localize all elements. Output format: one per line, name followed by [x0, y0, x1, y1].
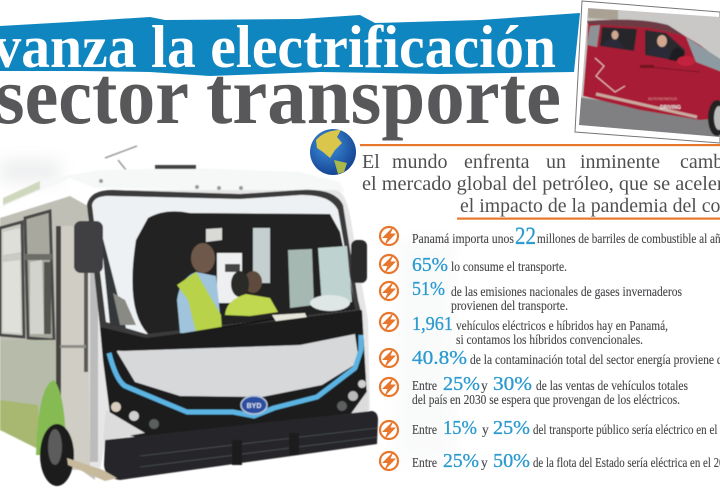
right mirror [351, 240, 367, 283]
fact 8: state fleet: 50% [493, 450, 530, 472]
wheel arch [36, 380, 66, 455]
fact 7: public transport: 25% [493, 417, 530, 439]
intro text: enfrenta [464, 151, 530, 173]
door [58, 226, 90, 470]
fact 6: sales 2030: 25% [443, 373, 480, 395]
title line 2: transporte [206, 50, 561, 141]
photo frame [575, 1, 720, 143]
front body [88, 190, 370, 470]
fact 7: public transport: 15% [443, 417, 477, 439]
fact 2: consumption [380, 254, 567, 276]
driver in vest [225, 271, 278, 316]
orange rule top [360, 144, 720, 146]
fact 8: state fleet: 25% [443, 450, 479, 472]
blue led strip [109, 335, 361, 416]
fact 8: state fleet: Entre [412, 455, 437, 470]
fact 8: state fleet [380, 450, 720, 472]
car scene: DRIVING [660, 105, 681, 111]
fact 2: consumption: 65% [412, 254, 448, 276]
silver corners [103, 410, 145, 440]
fact 6: sales 2030: de las ventas de vehículos totales [536, 378, 688, 393]
fact 3: emissions: 51% [412, 278, 445, 300]
icon: lightning [380, 254, 398, 274]
front bumper [104, 411, 378, 480]
title line 2: sector [0, 50, 189, 141]
wheel [40, 424, 74, 486]
windshield glass [92, 195, 356, 334]
fact 7: public transport [380, 417, 720, 440]
fact 6: sales 2030: 30% [493, 373, 532, 395]
bus roof [0, 168, 345, 208]
fact 2: consumption: lo consume el transporte. [451, 259, 567, 274]
icon: lightning [380, 348, 398, 368]
fact 5: pollution: 40.8% [412, 347, 467, 369]
fact 4: vehicles [380, 312, 668, 347]
fact 3: emissions: de las emisiones nacionales de gases invernaderos [451, 284, 682, 299]
intro text: un [546, 151, 566, 173]
byd logo [241, 396, 267, 414]
bus backdrop haze [0, 160, 455, 460]
grey front panel [117, 334, 359, 397]
green roof sign [3, 181, 40, 205]
fact 1: imports: Panamá importa unos [412, 231, 514, 246]
fact 6: sales 2030 [380, 373, 688, 407]
fact 4: vehicles: vehículos eléctricos e híbridos hay en Panamá, [456, 318, 668, 333]
intro text [362, 151, 720, 217]
fact 1: imports [380, 223, 720, 250]
black front mask [100, 310, 368, 440]
fact 3: emissions [380, 278, 682, 313]
fact 8: state fleet: y [481, 455, 488, 470]
fact 6: sales 2030: del país en 2030 se espera que provengan de los eléctricos. [412, 392, 680, 407]
roof bolts [99, 179, 243, 190]
fact 3: emissions: provienen del transporte. [451, 298, 568, 313]
windshield surround [87, 190, 362, 340]
icon: lightning [380, 226, 398, 246]
side of bus [0, 196, 95, 480]
title line 2 [0, 50, 561, 141]
icon: lightning [380, 420, 398, 440]
wipers [160, 318, 345, 338]
icon: lightning [380, 281, 398, 301]
fact 4: vehicles: si contamos los híbridos convencionales. [456, 332, 643, 347]
orange rule below intro [457, 218, 720, 220]
bus illustration: BYD [247, 403, 261, 410]
fact 7: public transport: Entre [412, 422, 437, 437]
passenger in vest [177, 243, 222, 333]
photo: red car with officials [575, 1, 720, 143]
car scene [575, 5, 720, 140]
left mirror [74, 221, 103, 273]
intro text: El [362, 151, 380, 173]
right headlights [337, 380, 366, 411]
side windows [0, 222, 24, 337]
fact 6: sales 2030: y [481, 378, 488, 393]
side lower panel [0, 340, 56, 452]
bus illustration [0, 146, 378, 486]
antenna [105, 146, 137, 170]
fact 4: vehicles: 1,961 [412, 313, 453, 335]
left headlights [111, 402, 159, 429]
intro text: mundo [392, 151, 448, 173]
step [67, 458, 117, 481]
fact 6: sales 2030: Entre [412, 378, 437, 393]
fact 1: imports: 22 [515, 223, 536, 250]
car scene: AUTONOMOUS [648, 96, 677, 101]
fact 7: public transport: y [482, 422, 489, 437]
title banner: blue torn paper [0, 13, 580, 76]
fact 5: pollution [380, 347, 720, 369]
intro text: inminente [580, 151, 660, 173]
dash papers [272, 313, 310, 328]
icon: lightning [380, 451, 398, 471]
icon: globe [310, 129, 356, 175]
icon: lightning [380, 312, 398, 332]
icon: lightning [380, 377, 398, 397]
windshield interior [132, 211, 356, 334]
